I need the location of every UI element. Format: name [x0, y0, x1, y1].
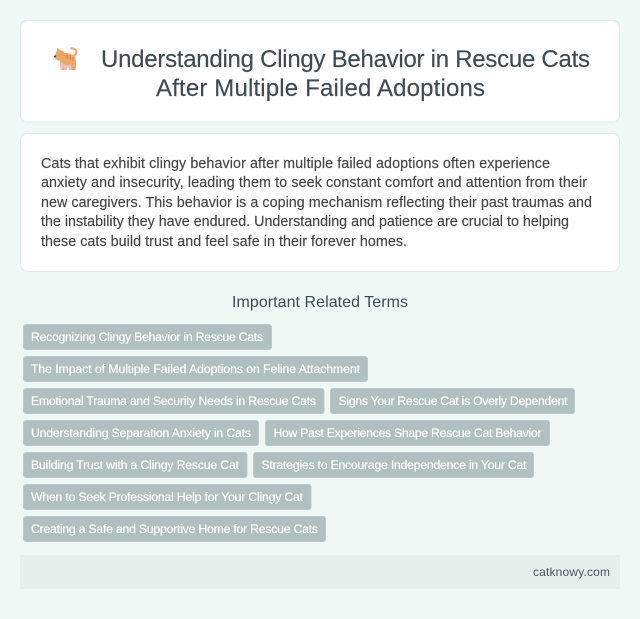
tag: How Past Experiences Shape Rescue Cat Behavior: [274, 426, 542, 440]
tag: Creating a Safe and Supportive Home for Rescue Cats: [31, 522, 318, 536]
tag: [24, 356, 368, 382]
icon: cat: [54, 47, 77, 70]
title: After Multiple Failed Adoptions: [156, 75, 485, 102]
tag: Recognizing Clingy Behavior in Rescue Cats: [31, 330, 263, 344]
description text: Cats that exhibit clingy behavior after multiple failed adoptions often experience: [41, 156, 550, 172]
tag: Signs Your Rescue Cat is Overly Dependent: [338, 394, 568, 408]
description card: [20, 134, 620, 272]
footer: [20, 555, 620, 589]
description text: anxiety and insecurity, leading them to seek constant comfort and attention from their: [41, 175, 587, 191]
tag: [24, 420, 258, 446]
tag: [24, 324, 272, 350]
tag: Emotional Trauma and Security Needs in Rescue Cats: [31, 394, 316, 408]
tag: [24, 484, 311, 510]
heading: related terms: Important Related Terms: [232, 294, 408, 311]
title: Understanding Clingy Behavior in Rescue Cats: [101, 46, 590, 73]
tag: [24, 516, 326, 542]
tag: [24, 452, 247, 478]
description text: the instability they have endured. Understanding and patience are crucial to helping: [41, 214, 569, 230]
title card: [20, 20, 620, 122]
tag: When to Seek Professional Help for Your Clingy Cat: [31, 490, 304, 504]
description text: these cats build trust and feel safe in their forever homes.: [41, 234, 407, 250]
tag: [24, 388, 324, 414]
tag: [266, 420, 550, 446]
description text: new caregivers. This behavior is a coping mechanism reflecting their past traumas and: [41, 195, 592, 211]
tag: Strategies to Encourage Independence in Your Cat: [262, 458, 527, 472]
tag: Building Trust with a Clingy Rescue Cat: [31, 458, 240, 472]
tag: [330, 388, 574, 414]
title: [101, 46, 590, 102]
tags: [24, 324, 574, 542]
footer source text: catknowy.com: [533, 565, 610, 579]
tag: [254, 452, 534, 478]
tag: The Impact of Multiple Failed Adoptions on Feline Attachment: [31, 362, 361, 376]
description text: [41, 156, 592, 250]
tag: Understanding Separation Anxiety in Cats: [31, 426, 251, 440]
